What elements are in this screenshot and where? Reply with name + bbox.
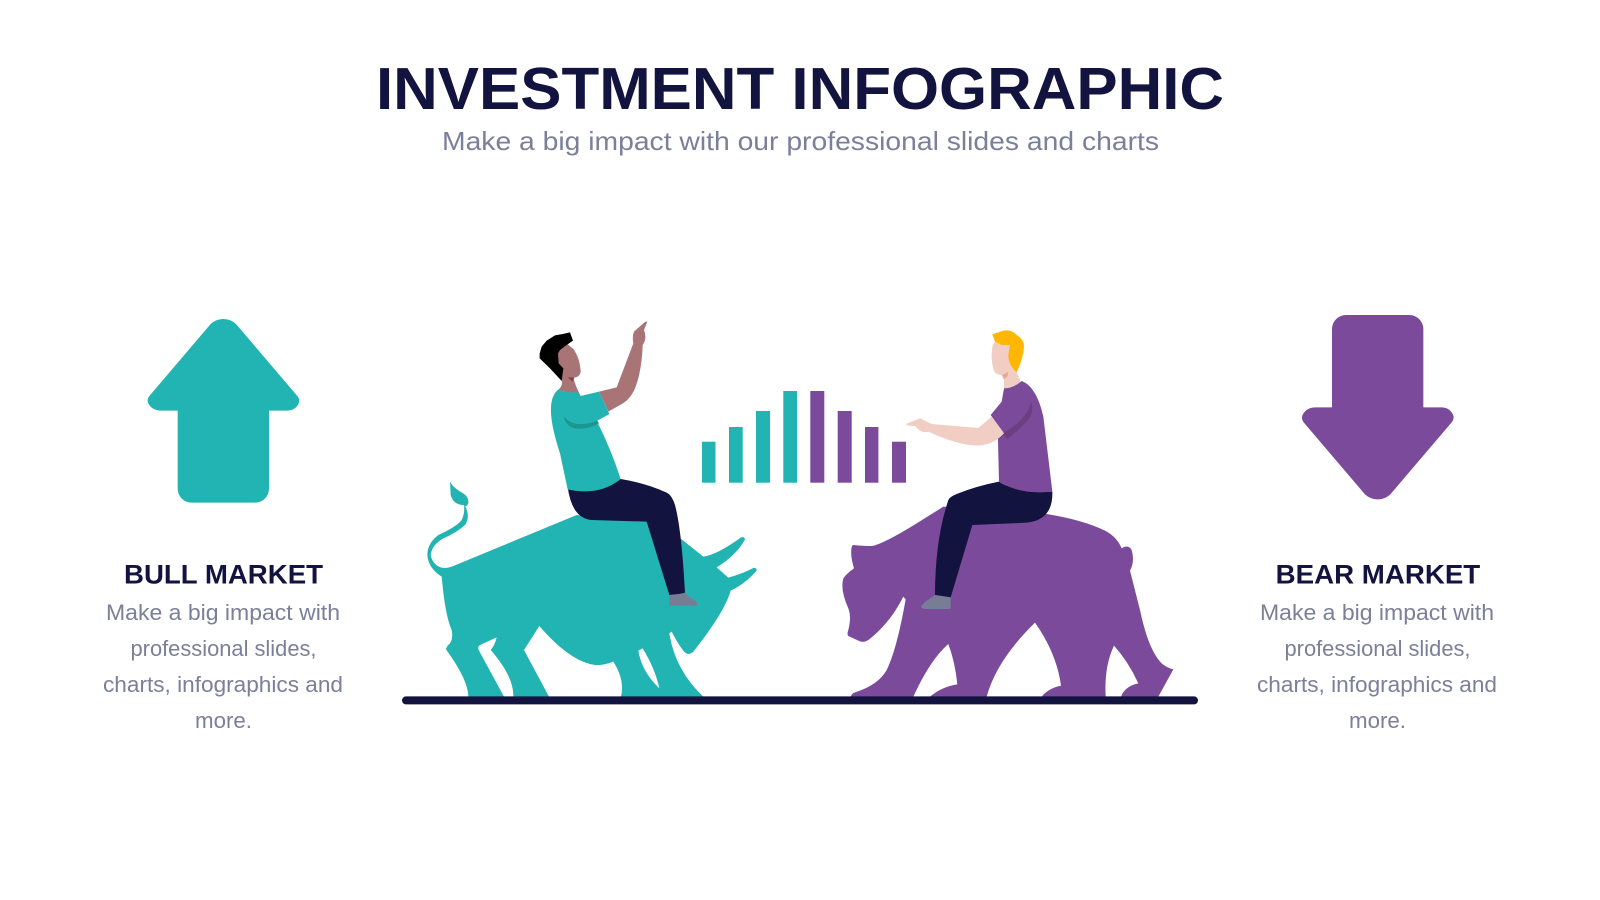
bear silhouette xyxy=(842,507,1173,697)
heading: bull market: BULL MARKET xyxy=(124,559,323,589)
text block: bull description: more. xyxy=(195,708,252,733)
rider: neck and face xyxy=(554,343,581,396)
rider: shoe xyxy=(921,595,951,609)
text block: bear description: Make a big impact with xyxy=(1260,600,1494,625)
text block: bull description: professional slides, xyxy=(130,636,316,661)
rider: arm xyxy=(599,322,647,412)
rider: shirt xyxy=(991,381,1052,492)
text block: bear description: professional slides, xyxy=(1284,636,1470,661)
icon: up arrow xyxy=(148,319,299,503)
bull silhouette xyxy=(427,482,757,697)
rider: neck shadow xyxy=(568,377,574,382)
rider: sleeve shadow xyxy=(564,416,599,429)
panel: bear market xyxy=(1257,315,1497,733)
text block: bull description xyxy=(103,600,343,733)
rider: shirt xyxy=(551,389,621,491)
ground line xyxy=(402,696,1198,704)
text block: bear description: more. xyxy=(1349,708,1406,733)
bar chart: falling bars xyxy=(810,391,906,483)
heading: bear market: BEAR MARKET xyxy=(1276,559,1480,589)
illustration: bull with rider xyxy=(427,322,757,697)
panel: bull market xyxy=(103,319,343,733)
text block: bull description: charts, infographics and xyxy=(103,672,343,697)
text block: bear description: charts, infographics and xyxy=(1257,672,1497,697)
rider: arm xyxy=(906,417,1004,446)
text block: bear description xyxy=(1257,600,1497,733)
rider: neck shadow xyxy=(1002,372,1008,379)
rider: neck and face xyxy=(992,340,1021,393)
bar chart: rising bars xyxy=(702,391,797,483)
rider: shoe xyxy=(669,593,698,606)
rider: hair xyxy=(992,330,1024,372)
illustration: bear with rider xyxy=(842,330,1173,697)
text block: bull description: Make a big impact with xyxy=(106,600,340,625)
rider: pants xyxy=(935,482,1052,597)
title: INVESTMENT INFOGRAPHIC xyxy=(376,55,1224,122)
rider: hair xyxy=(540,332,573,381)
rider: sleeve shadow xyxy=(998,402,1032,440)
rider: pants xyxy=(568,479,685,595)
icon: down arrow xyxy=(1302,315,1454,499)
header xyxy=(376,55,1224,156)
subtitle: Make a big impact with our professional slides and charts xyxy=(442,128,1159,156)
